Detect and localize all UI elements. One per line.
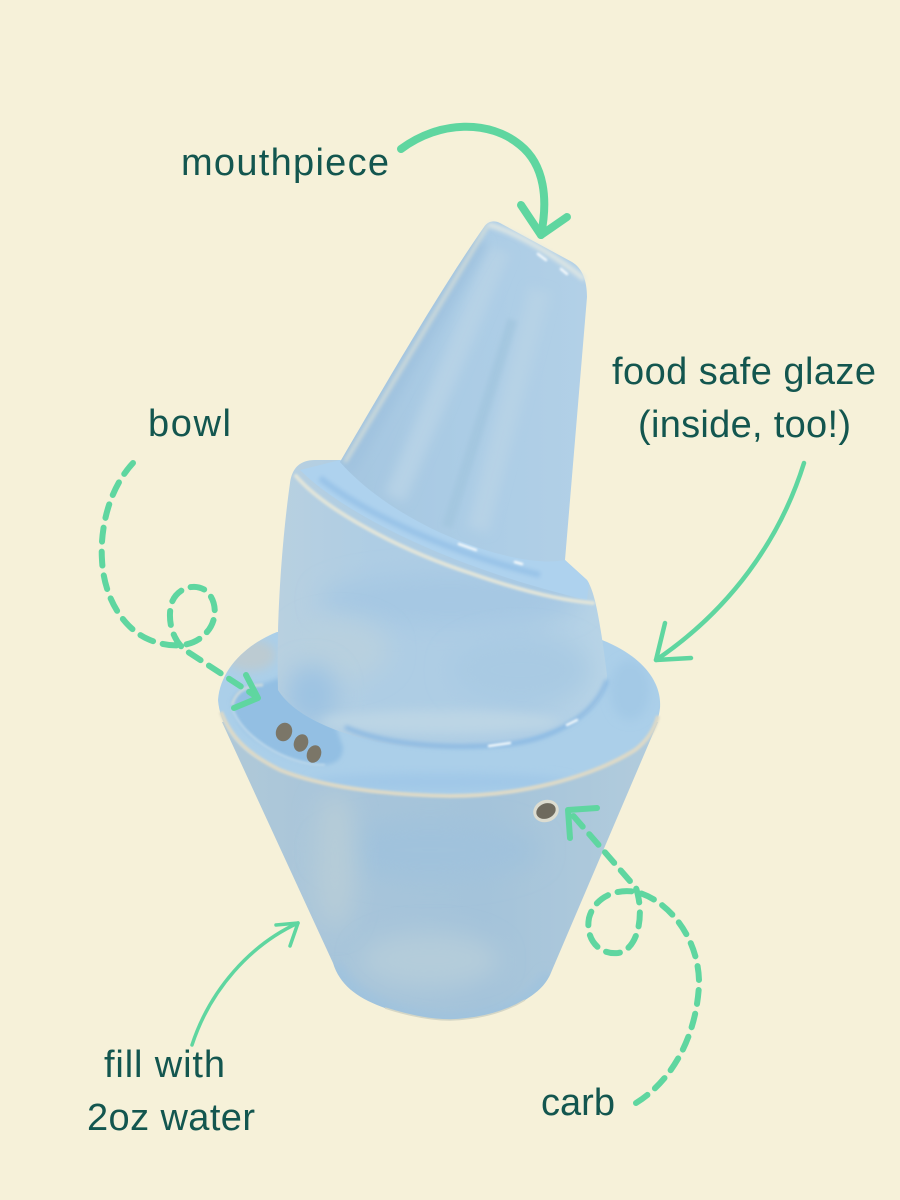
bowl lip	[232, 685, 263, 705]
tier groove	[345, 680, 607, 746]
label: fill with 2oz water: fill with	[104, 1044, 225, 1086]
illustration: blue ceramic piece	[218, 221, 660, 1020]
base cone	[222, 722, 658, 1020]
arrow: carb	[568, 808, 699, 1103]
mouthpiece opening highlight	[490, 225, 583, 278]
tier collar band	[300, 460, 590, 600]
arrow: bowl	[102, 463, 258, 708]
label: mouthpiece: mouthpiece	[181, 142, 389, 184]
carb hole	[530, 796, 562, 826]
label: fill with 2oz water: 2oz water	[87, 1097, 255, 1139]
rim lip	[221, 712, 658, 796]
label: fill with 2oz water	[87, 1044, 255, 1139]
label: carb: carb	[541, 1082, 615, 1124]
label: food safe glaze: (inside, too!)	[638, 404, 851, 446]
base top rim	[218, 632, 660, 797]
arrow: food safe glaze	[656, 463, 804, 660]
label: bowl: bowl	[148, 403, 231, 445]
arrow: mouthpiece	[401, 127, 567, 235]
label: food safe glaze	[612, 351, 876, 446]
bowl recess	[232, 672, 343, 765]
arrow: fill with water	[192, 923, 298, 1045]
tier rim highlight	[296, 476, 593, 603]
groove highlights	[489, 720, 577, 746]
mouthpiece cone	[340, 221, 587, 562]
base bottom edge	[385, 1000, 525, 1020]
label: food safe glaze: food safe glaze	[612, 351, 876, 393]
middle tier	[278, 460, 607, 748]
mouthpiece stripes	[482, 322, 514, 420]
bowl holes	[273, 720, 295, 744]
